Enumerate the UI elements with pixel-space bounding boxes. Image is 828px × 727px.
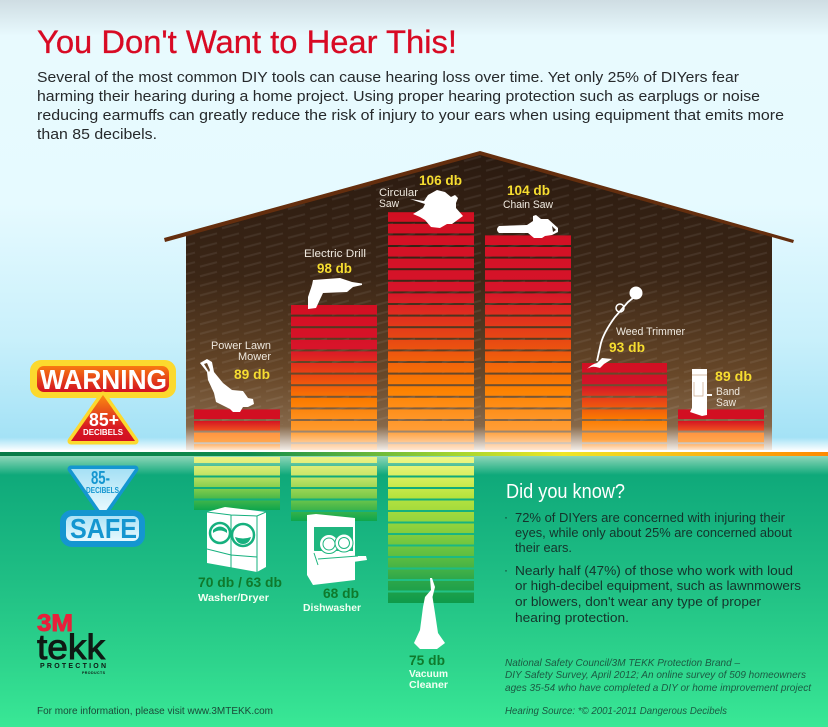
safe badge: DECIBELS — [86, 486, 120, 495]
label: circular saw: 106 db — [419, 172, 462, 188]
label: power lawn mower: 89 db — [234, 366, 270, 382]
intro text: reducing earmuffs can greatly reduce the risk of injury to your ears when using equipment that emits more — [37, 108, 784, 124]
safe badge: SAFE — [70, 513, 137, 544]
logo: 3M tekk protection: tekk — [37, 628, 106, 667]
did you know panel: eyes, while only about 25% are concerned about — [515, 526, 793, 540]
background: ground — [0, 456, 828, 727]
label: weed trimmer — [609, 326, 685, 355]
safe badge — [63, 468, 142, 544]
intro text: than 85 decibels. — [37, 127, 157, 143]
did you know panel: · — [504, 563, 508, 577]
icon: drill — [308, 278, 362, 309]
did you know panel: hearing protection. — [515, 611, 629, 625]
logo: 3M tekk protection — [37, 610, 106, 675]
label: electric drill: 98 db — [317, 260, 352, 276]
background: sky — [0, 0, 828, 451]
label: electric drill — [304, 248, 366, 276]
label: chain saw: 104 db — [507, 182, 550, 198]
safe badge: 85- — [91, 468, 110, 488]
icon: washer and dryer — [207, 507, 266, 572]
chart: quiet appliance bars below 85 dB — [194, 457, 474, 603]
intro text — [37, 70, 784, 143]
logo: 3M tekk protection: PROTECTION — [40, 663, 106, 670]
warning badge: WARNING — [40, 364, 167, 395]
label: circular saw: Saw — [379, 198, 399, 210]
did you know panel: Did you know? — [506, 481, 625, 503]
intro text: harming their hearing during a home project. Using proper hearing protection such as earplugs or noise — [37, 89, 760, 105]
label: washer/dryer: 70 db / 63 db — [198, 574, 282, 590]
label: washer/dryer — [198, 574, 282, 604]
icon: vacuum cleaner — [414, 578, 445, 649]
warning badge — [30, 360, 176, 441]
label: electric drill: Electric Drill — [304, 248, 366, 260]
label: power lawn mower — [211, 340, 271, 382]
chart: loud tools bars above 85 dB — [194, 212, 764, 450]
label: band saw: 89 db — [715, 368, 752, 384]
warning badge: 85+ — [89, 410, 119, 430]
title: You Don't Want to Hear This! — [37, 24, 457, 60]
label: washer/dryer: Washer/Dryer — [198, 592, 269, 604]
label: band saw — [715, 368, 752, 409]
house — [164, 151, 794, 451]
label: power lawn mower: Mower — [238, 351, 271, 363]
did you know panel: or high-decibel equipment, such as lawnmowers — [515, 579, 801, 593]
label: vacuum cleaner: Vacuum — [409, 668, 448, 680]
icon: dishwasher — [307, 514, 367, 585]
label: weed trimmer: 93 db — [609, 339, 645, 355]
logo: 3M tekk protection: PRODUCTS — [82, 671, 106, 675]
label: chain saw: Chain Saw — [503, 199, 553, 211]
did you know panel: · — [504, 510, 508, 524]
icon: chain saw — [497, 215, 558, 238]
sources: National Safety Council/3M TEKK Protection Brand – — [505, 657, 740, 669]
label: band saw: Saw — [716, 397, 736, 409]
sources — [505, 657, 812, 717]
label: power lawn mower: Power Lawn — [211, 340, 271, 352]
horizon band — [0, 450, 828, 456]
label: chain saw — [503, 182, 553, 211]
warning badge: DECIBELS — [83, 428, 124, 437]
sources: Hearing Source: *© 2001-2011 Dangerous Decibels — [505, 705, 728, 717]
did you know panel: Nearly half (47%) of those who work with loud — [515, 564, 793, 578]
label: band saw: Band — [716, 386, 740, 398]
label: weed trimmer: Weed Trimmer — [616, 326, 685, 338]
sources: DIY Safety Survey, April 2012; An online survey of 509 homeowners — [505, 669, 807, 681]
label: circular saw: Circular — [379, 187, 418, 199]
logo: 3M tekk protection: 3M — [37, 610, 73, 637]
did you know panel — [504, 481, 801, 625]
label: dishwasher — [303, 585, 361, 614]
sources: ages 35-54 who have completed a DIY or home improvement project — [505, 682, 812, 694]
intro text: Several of the most common DIY tools can cause hearing loss over time. Yet only 25% of DIYers fear — [37, 70, 739, 86]
icon: band saw — [690, 369, 712, 416]
icon: weed trimmer — [587, 286, 642, 369]
label: dishwasher: Dishwasher — [303, 602, 361, 614]
did you know panel: 72% of DIYers are concerned with injuring their — [515, 511, 785, 525]
did you know panel: their ears. — [515, 541, 572, 555]
label: circular saw — [379, 172, 462, 210]
label: vacuum cleaner — [409, 652, 448, 691]
label: vacuum cleaner: Cleaner — [409, 679, 448, 691]
icon: circular saw — [410, 190, 463, 228]
footer link text: For more information, please visit www.3MTEKK.com — [37, 705, 273, 717]
label: dishwasher: 68 db — [323, 585, 359, 601]
icon: lawn mower — [200, 359, 254, 412]
label: vacuum cleaner: 75 db — [409, 652, 445, 668]
did you know panel: or blowers, don't wear any type of proper — [515, 595, 761, 609]
